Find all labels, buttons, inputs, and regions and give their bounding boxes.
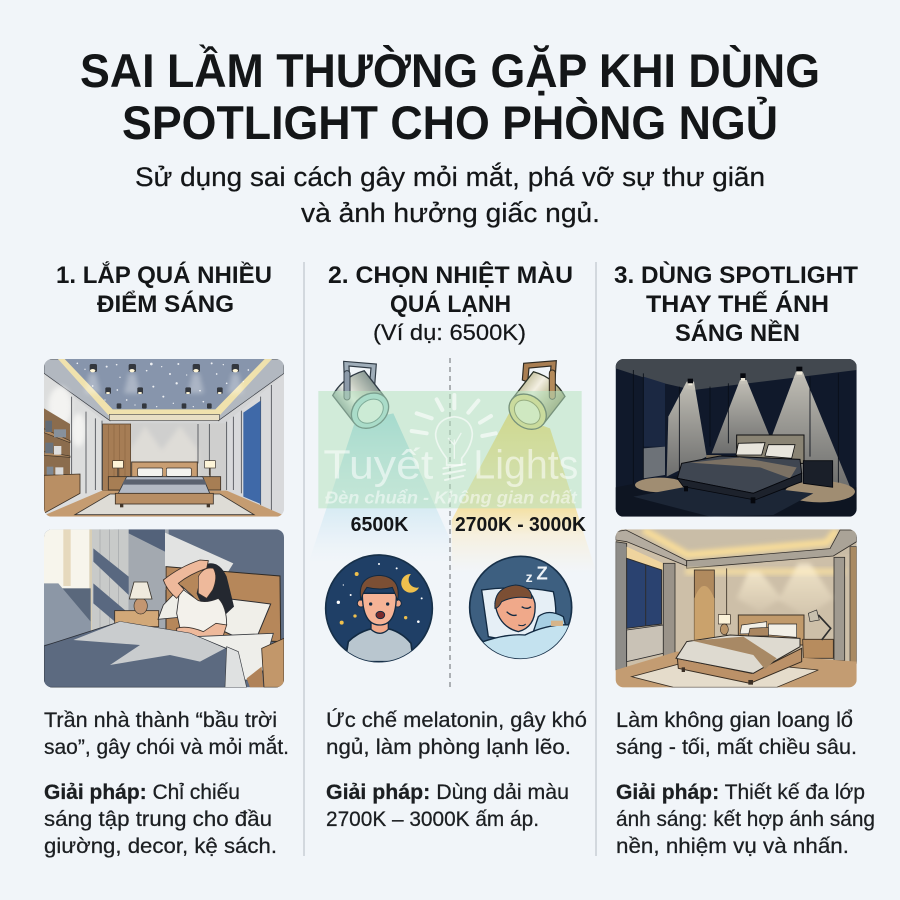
watermark: brand name: Đèn chuẩn - Không gian chất bbox=[325, 487, 578, 507]
text block: mistake 3 solution: nền, nhiệm vụ và nhấn. bbox=[616, 835, 849, 858]
watermark: brand name bbox=[323, 441, 578, 507]
text block: mistake 1 problem: Trần nhà thành “bầu trời bbox=[44, 709, 277, 732]
watermark: bulb icon bbox=[412, 395, 496, 480]
icon: cold spotlight bbox=[330, 361, 396, 436]
icon: person sleeping peacefully bbox=[470, 556, 572, 663]
text block: mistake 3 problem: sáng - tối, mất chiều sâu. bbox=[616, 736, 857, 759]
column dividers bbox=[304, 262, 596, 856]
snore letters bbox=[526, 562, 548, 585]
text block: mistake 3 solution: Giải pháp: Thiết kế đa lớp bbox=[616, 781, 865, 804]
light beam: warm bbox=[452, 413, 597, 573]
subtitle: và ảnh hưởng giấc ngủ. bbox=[301, 198, 600, 228]
label: 6500K: 6500K bbox=[351, 514, 409, 536]
heading: mistake 2: (Ví dụ: 6500K) bbox=[373, 320, 526, 345]
illustration: bedroom with starry ceiling of spotlights bbox=[44, 359, 284, 517]
text block: mistake 2 problem: Ức chế melatonin, gây khó bbox=[326, 709, 587, 732]
text block: mistake 1 solution: Giải pháp: Chỉ chiếu bbox=[44, 781, 240, 804]
title: SPOTLIGHT CHO PHÒNG NGỦ bbox=[122, 96, 778, 149]
watermark: brand name: Tuyết bbox=[323, 441, 433, 487]
subtitle: Sử dụng sai cách gây mỏi mắt, phá vỡ sự thư giãn bbox=[135, 161, 765, 192]
text block: mistake 1 solution: giường, decor, kệ sách. bbox=[44, 835, 277, 858]
text block: mistake 3 problem bbox=[616, 709, 857, 759]
text block: mistake 1 solution bbox=[44, 781, 277, 858]
heading: mistake 3: THAY THẾ ÁNH bbox=[646, 290, 829, 318]
heading: mistake 1 bbox=[56, 261, 272, 318]
text block: mistake 2 solution bbox=[326, 781, 569, 831]
heading: mistake 3: 3. DÙNG SPOTLIGHT bbox=[614, 261, 858, 289]
illustration: layered warm lighting bedroom bbox=[616, 529, 857, 687]
text block: mistake 3 problem: Làm không gian loang lổ bbox=[616, 709, 853, 732]
illustration: woman in bed shielding eyes from glare bbox=[44, 529, 284, 687]
heading: mistake 1: 1. LẮP QUÁ NHIỀU bbox=[56, 261, 272, 289]
heading: mistake 3 bbox=[614, 261, 858, 347]
comparison graphic: cold and warm spotlights bbox=[308, 361, 597, 663]
text block: mistake 1 problem: sao”, gây chói và mỏi mắt. bbox=[44, 736, 289, 759]
heading: mistake 2 bbox=[328, 261, 573, 345]
text block: mistake 3 solution: ánh sáng: kết hợp ánh sáng bbox=[616, 808, 875, 831]
snore letters: z bbox=[526, 569, 533, 585]
icon: warm spotlight bbox=[502, 361, 568, 437]
text block: mistake 1 problem bbox=[44, 709, 289, 759]
title: SAI LẦM THƯỜNG GẶP KHI DÙNG bbox=[80, 44, 820, 97]
text block: mistake 2 problem bbox=[326, 709, 587, 759]
heading: mistake 2: QUÁ LẠNH bbox=[390, 290, 511, 318]
heading: mistake 1: ĐIỂM SÁNG bbox=[97, 290, 234, 318]
heading: mistake 2: 2. CHỌN NHIỆT MÀU bbox=[328, 261, 573, 289]
center dashed divider bbox=[449, 358, 451, 690]
subtitle bbox=[135, 161, 765, 228]
snore letters: Z bbox=[536, 562, 548, 583]
text block: mistake 2 solution: Giải pháp: Dùng dải màu bbox=[326, 781, 569, 804]
illustration: dark bedroom with harsh spotlight cones only bbox=[616, 359, 857, 517]
icon: awake person at night bbox=[326, 555, 432, 662]
text block: mistake 3 solution bbox=[616, 781, 875, 858]
watermark panel bbox=[318, 391, 582, 508]
text block: mistake 2 problem: ngủ, làm phòng lạnh lẽo. bbox=[326, 736, 571, 759]
text block: mistake 1 solution: sáng tập trung cho đầu bbox=[44, 808, 272, 831]
heading: mistake 3: SÁNG NỀN bbox=[675, 319, 800, 347]
text block: mistake 2 solution: 2700K – 3000K ấm áp. bbox=[326, 808, 539, 831]
light beam: cold bbox=[308, 413, 449, 563]
watermark: brand name: Lights bbox=[473, 441, 578, 487]
title bbox=[80, 44, 820, 149]
label: 2700K - 3000K: 2700K - 3000K bbox=[455, 514, 587, 536]
